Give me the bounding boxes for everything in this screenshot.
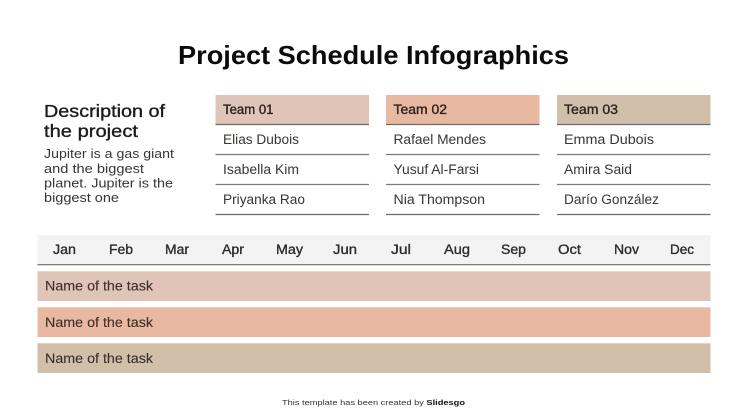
team 01 members: Priyanka Rao xyxy=(223,192,305,207)
panel: team 01 xyxy=(216,95,369,214)
month header bar xyxy=(38,235,710,265)
team 03 header xyxy=(557,95,710,124)
month header bar: Oct xyxy=(558,242,581,257)
team 03 members: Emma Dubois xyxy=(564,132,654,147)
description heading xyxy=(44,101,165,141)
team 01 header xyxy=(216,95,369,124)
team 02 header xyxy=(386,95,540,124)
description body text: Jupiter is a gas giant xyxy=(44,146,174,161)
team 01 members: Isabella Kim xyxy=(223,162,299,177)
panel: team 03 xyxy=(557,95,710,214)
task bar 2: Name of the task xyxy=(45,315,153,330)
panel: team 02 xyxy=(386,95,540,214)
team 01 members xyxy=(216,132,369,214)
task bar 3 xyxy=(38,343,710,373)
month header bar: Jun xyxy=(333,242,357,257)
team 03 members: Amira Said xyxy=(564,162,632,177)
description heading: the project xyxy=(44,121,138,141)
task bar 1 xyxy=(38,271,710,301)
task bar 1: Name of the task xyxy=(45,279,153,294)
month header bar: Jan xyxy=(53,242,76,257)
panel: project description xyxy=(44,101,174,205)
footer credit: This template has been created by Slidesgo xyxy=(282,398,466,407)
description body text: biggest one xyxy=(44,190,119,205)
team 03 header: Team 03 xyxy=(564,102,618,117)
team 02 members: Yusuf Al-Farsi xyxy=(394,162,479,177)
month header bar: Apr xyxy=(222,242,245,257)
month header bar: Feb xyxy=(109,242,133,257)
team 02 header: Team 02 xyxy=(394,102,447,117)
description heading: Description of xyxy=(44,101,165,121)
month header bar: May xyxy=(276,242,303,257)
team 02 members: Nia Thompson xyxy=(394,192,485,207)
month header bar: Jul xyxy=(391,242,411,257)
month header bar: Sep xyxy=(501,242,526,257)
team 03 members xyxy=(557,132,710,214)
description body text xyxy=(44,146,174,205)
team 01 members: Elias Dubois xyxy=(223,132,299,147)
team 02 members: Rafael Mendes xyxy=(394,132,486,147)
month header bar: Dec xyxy=(670,242,694,257)
month header bar: Aug xyxy=(444,242,470,257)
team 03 members: Darío González xyxy=(564,192,659,207)
description body text: and the biggest xyxy=(44,161,144,176)
month header bar: Mar xyxy=(165,242,190,257)
month header bar: Nov xyxy=(614,242,639,257)
title: Project Schedule Infographics xyxy=(178,40,569,70)
task bar 3: Name of the task xyxy=(45,351,153,366)
team 01 header: Team 01 xyxy=(223,102,274,117)
task bar 2 xyxy=(38,307,710,337)
team 02 members xyxy=(386,132,540,214)
description body text: planet. Jupiter is the xyxy=(44,176,173,190)
